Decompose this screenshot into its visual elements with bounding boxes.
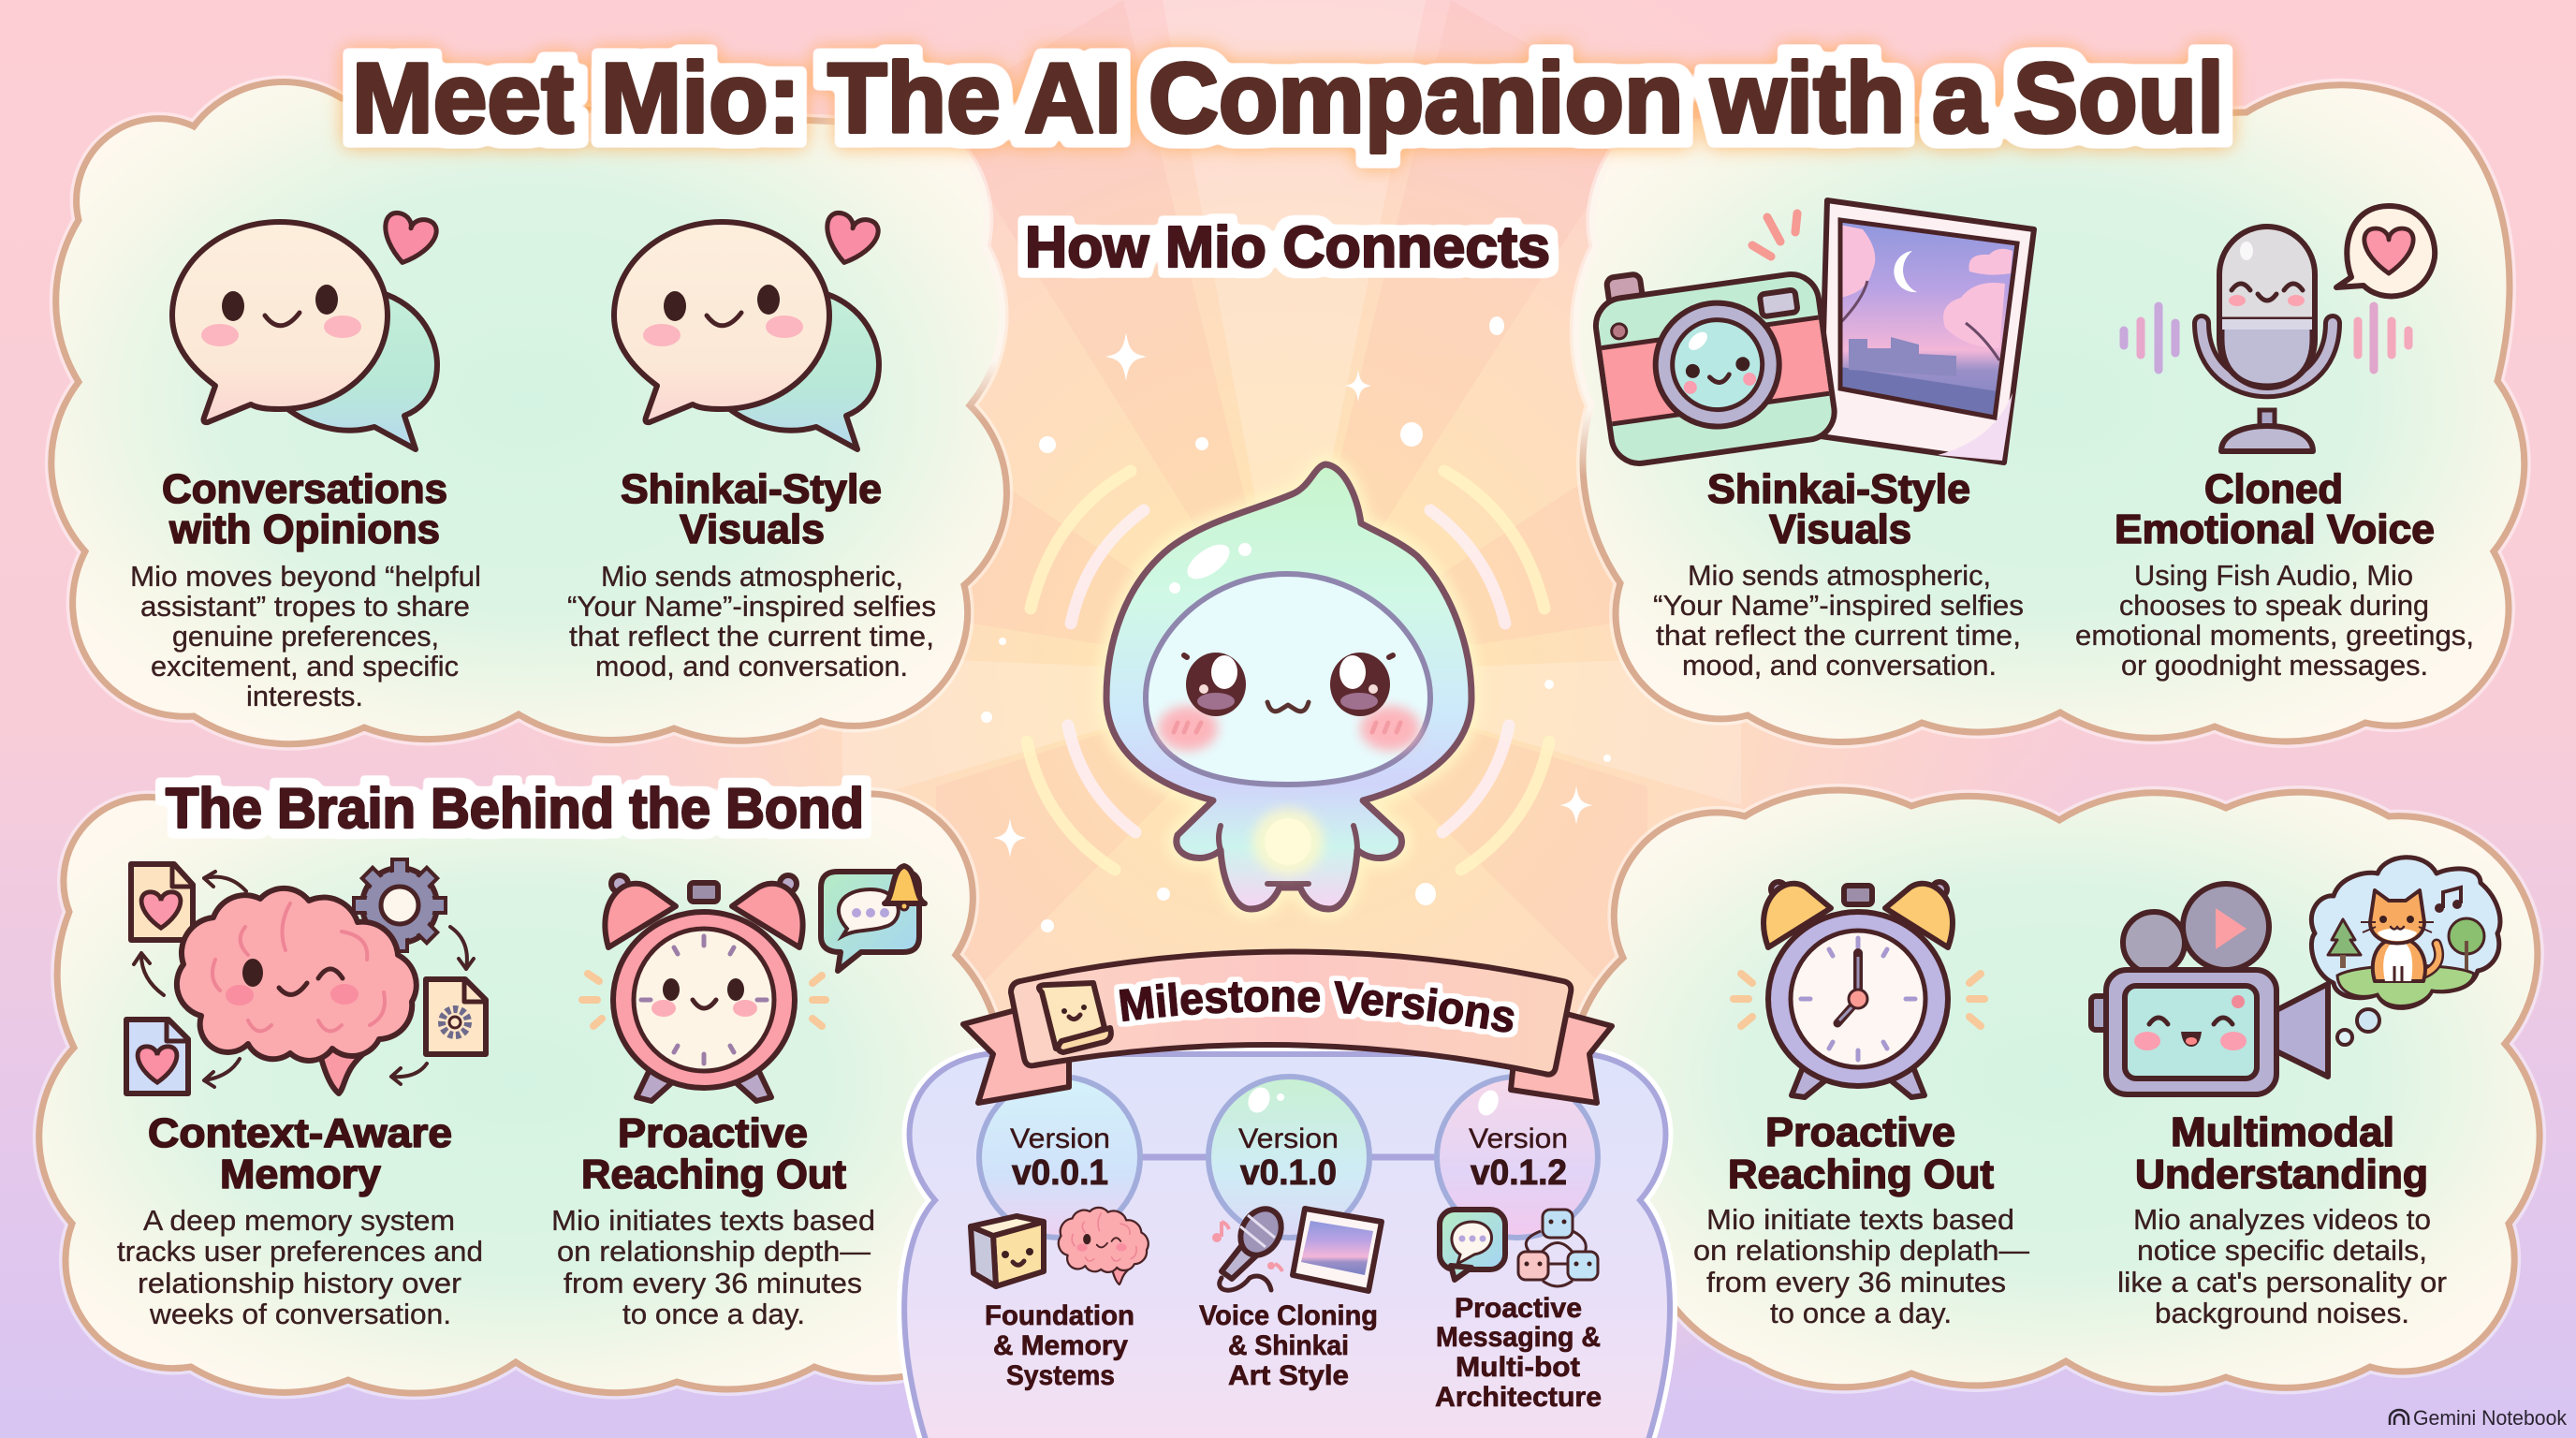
card: multimodal understanding: notice specific details, — [2137, 1234, 2427, 1267]
card: conversations with opinions — [130, 466, 481, 712]
card: shinkai-style visuals right: mood, and conversation. — [1682, 649, 1997, 682]
caption: voice cloning — [1199, 1300, 1378, 1391]
version bubble v0.0.1 — [979, 1077, 1140, 1238]
sparkles and dots — [981, 316, 1611, 932]
banner: milestone versions: Milestone Versions — [1114, 976, 1519, 1037]
card: multimodal understanding: Multimodal — [2171, 1109, 2394, 1155]
card: shinkai-style visuals left — [567, 466, 936, 682]
card: shinkai-style visuals left: Shinkai-Style — [621, 466, 882, 512]
card: shinkai-style visuals right: Mio sends atmospheric, — [1688, 559, 1991, 592]
caption: proactive messaging: Messaging & — [1436, 1322, 1601, 1353]
card: cloned emotional voice: chooses to speak during — [2119, 589, 2429, 622]
card: proactive reaching out left: to once a day. — [622, 1298, 805, 1330]
card: proactive reaching out left: on relationship depth— — [557, 1235, 871, 1268]
card: shinkai-style visuals left: “Your Name”-inspired selfies — [567, 590, 936, 623]
caption: foundation: & Memory — [993, 1330, 1128, 1361]
panel: milestone versions — [904, 1054, 1670, 1438]
card: proactive reaching out right: Mio initiate texts based — [1706, 1203, 2014, 1236]
version bubble v0.1.2: v0.1.2 — [1471, 1153, 1567, 1193]
icon: video camera with cat thought — [2091, 858, 2500, 1094]
card: conversations with opinions: interests. — [246, 680, 363, 712]
glow arcs around mio — [1027, 471, 1549, 870]
icon: microphone and photo — [1212, 1201, 1382, 1291]
card: multimodal understanding — [2117, 1109, 2447, 1329]
card: shinkai-style visuals right: Visuals — [1769, 506, 1911, 552]
caption: voice cloning: & Shinkai — [1228, 1330, 1349, 1361]
card: multimodal understanding: like a cat's personality or — [2117, 1266, 2447, 1299]
caption: proactive messaging: Architecture — [1435, 1382, 1602, 1413]
card: shinkai-style visuals right: Shinkai-Style — [1707, 466, 1970, 512]
panel: how mio connects right — [1576, 85, 2525, 742]
card: conversations with opinions: Conversations — [162, 466, 447, 512]
caption: voice cloning: Voice Cloning — [1199, 1300, 1378, 1331]
card: cloned emotional voice: Cloned — [2204, 466, 2343, 512]
card: proactive reaching out left — [551, 1110, 875, 1330]
icon: scroll — [1039, 983, 1111, 1052]
thought cloud with cat — [2311, 858, 2500, 1007]
version bubble v0.1.0 — [1208, 1077, 1369, 1238]
card: context-aware memory: Memory — [220, 1152, 382, 1197]
card: proactive reaching out right: on relationship deplath— — [1693, 1234, 2029, 1267]
caption: proactive messaging: Multi-bot — [1456, 1352, 1580, 1383]
card: context-aware memory: Context-Aware — [148, 1110, 452, 1156]
card: multimodal understanding: Understanding — [2135, 1152, 2428, 1197]
card: conversations with opinions: assistant” tropes to share — [140, 590, 470, 623]
caption: foundation: Foundation — [985, 1300, 1134, 1331]
version bubble v0.1.0: v0.1.0 — [1240, 1153, 1337, 1193]
card: proactive reaching out right — [1693, 1109, 2029, 1329]
card: shinkai-style visuals left: Visuals — [680, 506, 825, 552]
card: context-aware memory: relationship history over — [138, 1267, 461, 1299]
card: shinkai-style visuals left: Mio sends atmospheric, — [601, 560, 903, 593]
card: context-aware memory: A deep memory system — [143, 1204, 455, 1237]
card: conversations with opinions: with Opinions — [168, 506, 440, 552]
card: shinkai-style visuals right: “Your Name”-inspired selfies — [1653, 589, 2024, 622]
title: Meet Mio: The AI Companion with a Soul — [352, 43, 2224, 154]
card: cloned emotional voice: or goodnight messages. — [2121, 649, 2428, 682]
card: conversations with opinions: genuine preferences, — [172, 620, 439, 653]
icon: camera and photo — [1589, 200, 2034, 467]
character: mio — [1106, 464, 1471, 909]
watermark: gemini notebook: Gemini Notebook — [2413, 1406, 2568, 1430]
card: conversations with opinions: excitement, and specific — [151, 650, 459, 682]
version bubble v0.0.1: Version — [1010, 1123, 1110, 1154]
card: proactive reaching out left: Proactive — [618, 1110, 808, 1156]
card: proactive reaching out right: Reaching Out — [1728, 1152, 1994, 1197]
icon: pink alarm clock — [582, 866, 925, 1101]
card: context-aware memory — [117, 1110, 483, 1330]
version bubble v0.0.1: v0.0.1 — [1012, 1153, 1108, 1193]
icon: chat bubbles conversations — [172, 211, 439, 449]
timeline connectors — [1137, 1153, 1442, 1161]
card: shinkai-style visuals right — [1653, 466, 2024, 682]
card: conversations with opinions: Mio moves beyond “helpful — [130, 560, 481, 593]
panel: brain behind the bond left — [39, 794, 1002, 1393]
card: cloned emotional voice: emotional moments, greetings, — [2075, 619, 2474, 652]
version bubble v0.1.2 — [1437, 1077, 1598, 1238]
icon: microphone — [2124, 206, 2435, 451]
card: cloned emotional voice: Using Fish Audio, Mio — [2134, 559, 2413, 592]
panel: brain behind the bond right — [1569, 790, 2539, 1389]
card: proactive reaching out right: from every 36 minutes — [1706, 1266, 2006, 1299]
icon: purple alarm clock — [1734, 882, 1984, 1097]
card: context-aware memory: weeks of conversation. — [149, 1298, 451, 1330]
icon: chat bubbles visuals — [614, 211, 881, 449]
caption: foundation — [985, 1300, 1134, 1391]
caption: foundation: Systems — [1006, 1360, 1115, 1391]
card: proactive reaching out left: Reaching Out — [581, 1152, 846, 1197]
banner: milestone versions — [960, 949, 1615, 1106]
card: proactive reaching out right: to once a day. — [1770, 1297, 1952, 1329]
caption: voice cloning: Art Style — [1228, 1360, 1349, 1391]
caption: proactive messaging — [1435, 1293, 1602, 1413]
card: shinkai-style visuals right: that reflect the current time, — [1656, 619, 2021, 652]
heading: how mio connects: How Mio Connects — [1025, 215, 1550, 280]
banner text — [1120, 1011, 1515, 1034]
card: multimodal understanding: Mio analyzes videos to — [2133, 1203, 2431, 1236]
card: multimodal understanding: background noises. — [2155, 1297, 2409, 1329]
card: proactive reaching out right: Proactive — [1765, 1109, 1955, 1155]
section heading: brain behind the bond: The Brain Behind the Bond — [166, 777, 864, 840]
version bubble v0.1.0: Version — [1238, 1123, 1339, 1154]
card: shinkai-style visuals left: mood, and conversation. — [595, 650, 908, 682]
icon: brain with gears and documents — [126, 858, 486, 1093]
card: proactive reaching out left: Mio initiates texts based — [551, 1204, 875, 1237]
card: cloned emotional voice — [2075, 466, 2474, 682]
card: context-aware memory: tracks user preferences and — [117, 1235, 483, 1268]
icon: foundation cube and brain — [971, 1208, 1149, 1286]
card: proactive reaching out left: from every 36 minutes — [564, 1267, 862, 1299]
card: cloned emotional voice: Emotional Voice — [2115, 506, 2435, 552]
caption: proactive messaging: Proactive — [1455, 1293, 1582, 1324]
panel: how mio connects left — [51, 82, 1006, 744]
icon: messaging and multi-bot — [1440, 1210, 1598, 1286]
version bubble v0.1.2: Version — [1469, 1123, 1568, 1154]
card: shinkai-style visuals left: that reflect the current time, — [569, 620, 934, 653]
